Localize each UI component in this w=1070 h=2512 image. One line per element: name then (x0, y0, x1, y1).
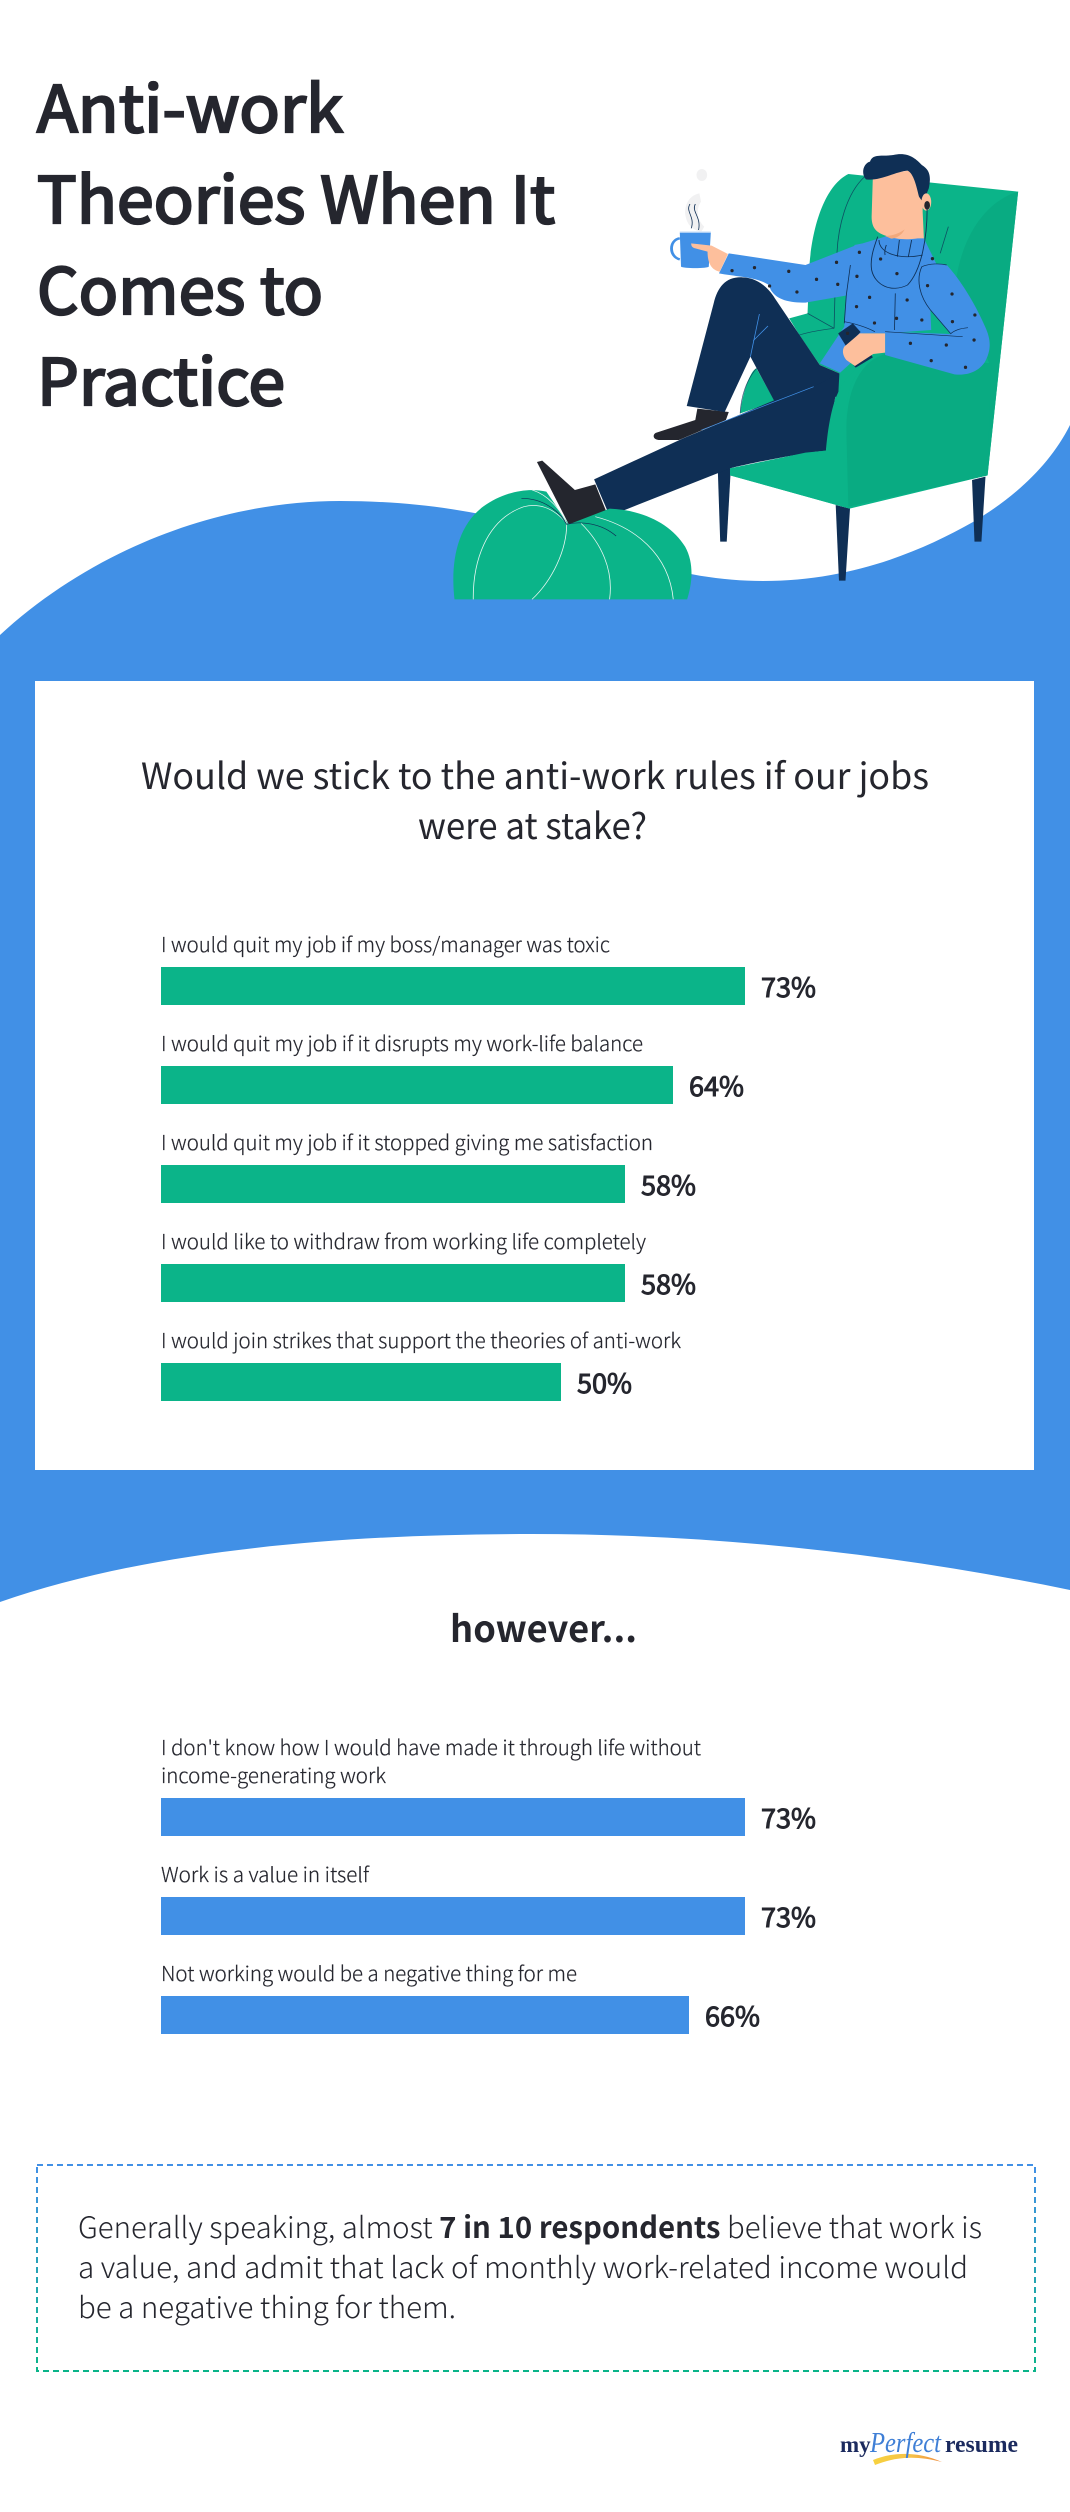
bar row: withdraw 58% (161, 1225, 696, 1302)
title: Anti-work (37, 59, 343, 151)
icon: chair front armrest (846, 354, 991, 507)
bar row: work-life balance 64%: I would quit my job if it disrupts my work-life balance (161, 1027, 643, 1057)
icon: sweater polka dots (730, 251, 977, 369)
icon: chair legs (718, 468, 986, 581)
icon: footstool (453, 490, 692, 599)
bar chart: value of work (161, 1731, 816, 2034)
bar row: income-generating work 73%: I don't know how I would have made it through life without (161, 1731, 701, 1761)
icon: sweater arms (719, 245, 990, 375)
bar row: satisfaction 58% (161, 1126, 696, 1203)
bar row: income-generating work 73%: income-generating work (161, 1759, 386, 1789)
bar row: toxic boss 73%: 73% (761, 966, 816, 1005)
logo: myPerfectResume: Perfect (869, 2428, 942, 2459)
logo: myPerfectResume (840, 2428, 1018, 2465)
logo: myPerfectResume: resume (945, 2432, 1018, 2458)
icon: head and hair (863, 154, 931, 239)
bar row: work-life balance 64%: 64% (689, 1065, 744, 1104)
illustration: man relaxing in green armchair (453, 154, 1018, 599)
title: Comes to (37, 241, 323, 333)
bar row: toxic boss 73%: I would quit my job if my boss/manager was toxic (161, 928, 610, 958)
bar row: negative thing 66%: 66% (705, 1995, 760, 2034)
bar row: strikes 50% (161, 1324, 681, 1401)
icon: coffee mug with steam (672, 169, 711, 268)
blue wave background (0, 425, 1070, 1602)
bar row: income-generating work 73%: 73% (761, 1797, 816, 1836)
icon: phone and hand (838, 323, 885, 368)
icon: back shoe (654, 409, 729, 440)
bar row: value in itself 73%: Work is a value in itself (161, 1858, 370, 1888)
callout: dashed summary box (37, 2165, 1035, 2371)
bar row: work-life balance 64% (161, 1027, 744, 1104)
icon: earphone cord and collar (871, 208, 927, 288)
icon: hand on mug (691, 243, 728, 272)
callout: dashed summary box: be a negative thing for them. (78, 2285, 456, 2327)
logo: myPerfectResume: my (840, 2432, 871, 2457)
bar row: strikes 50%: I would join strikes that support the theories of anti-work (161, 1324, 681, 1354)
bar row: withdraw 58%: 58% (641, 1263, 696, 1302)
icon: trousers (594, 277, 839, 516)
icon: sweater torso (820, 236, 936, 373)
bar row: negative thing 66%: Not working would be a negative thing for me (161, 1957, 577, 1987)
bar row: negative thing 66% (161, 1957, 760, 2034)
bar row: satisfaction 58%: 58% (641, 1164, 696, 1203)
bar row: satisfaction 58%: I would quit my job if it stopped giving me satisfaction (161, 1126, 653, 1156)
bar chart: anti-work rules (161, 928, 816, 1401)
heading: survey question (141, 748, 929, 850)
heading: survey question: were at stake? (418, 798, 647, 850)
icon: front shoe (537, 461, 606, 524)
bar row: toxic boss 73% (161, 928, 816, 1005)
bar row: value in itself 73% (161, 1858, 816, 1935)
bar row: value in itself 73%: 73% (761, 1896, 816, 1935)
title: Theories When It (37, 150, 555, 242)
heading: survey question: Would we stick to the anti-work rules if our jobs (141, 748, 929, 800)
bar row: income-generating work 73% (161, 1731, 816, 1836)
callout: dashed summary box: Generally speaking, almost 7 in 10 respondents believe that work is (78, 2205, 982, 2247)
title (37, 59, 555, 424)
bar row: strikes 50%: 50% (577, 1362, 632, 1401)
title: Practice (37, 332, 285, 424)
bar row: withdraw 58%: I would like to withdraw from working life completely (161, 1225, 646, 1255)
panel: anti-work rules survey card (35, 681, 1034, 1470)
callout: dashed summary box: a value, and admit that lack of monthly work-related income would (78, 2245, 968, 2287)
heading: however: however... (450, 1600, 637, 1653)
icon: armchair body (730, 174, 1018, 509)
